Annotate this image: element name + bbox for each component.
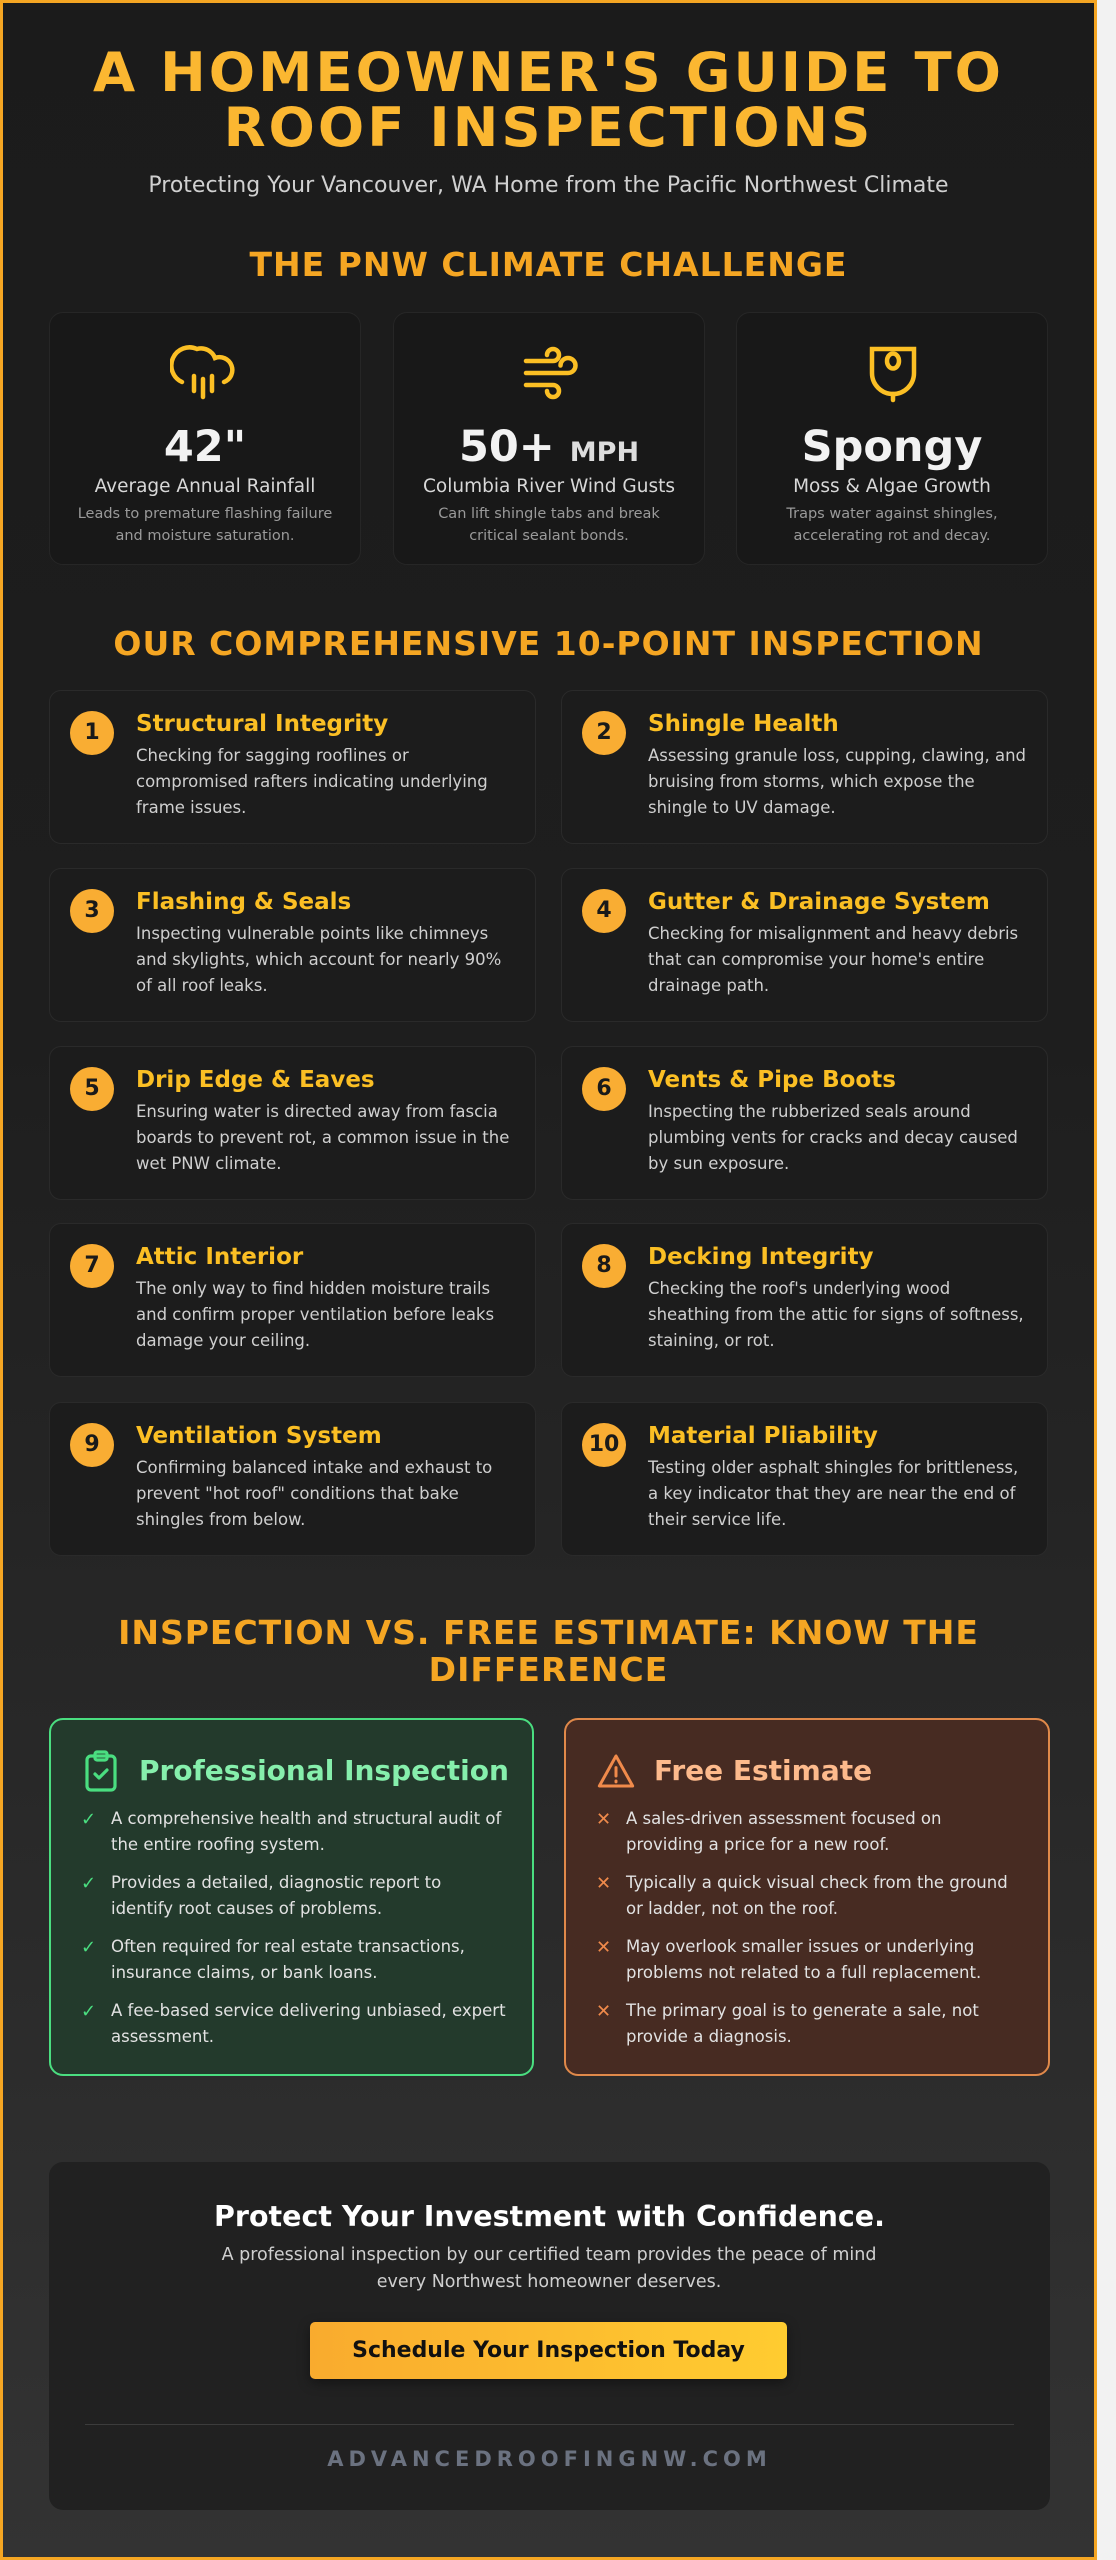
icon: rain cloud: [170, 345, 235, 400]
list: A comprehensive health and structural audit of the entire roofing system.: [111, 1809, 501, 1854]
card 6: Vents & Pipe Boots: [648, 1067, 896, 1093]
card 1: 1: [84, 720, 100, 745]
card 8: Checking the roof's underlying wood sheathing from the attic for signs of softness, staining, or rot.: [648, 1279, 1024, 1350]
card 10: Testing older asphalt shingles for brittleness, a key indicator that they are near the end of their service life.: [648, 1458, 1018, 1529]
title: [93, 40, 1004, 159]
card 10: 10: [589, 1432, 619, 1457]
heading: climate challenge: THE PNW CLIMATE CHALLENGE: [250, 245, 847, 284]
card 2: 2: [596, 720, 612, 745]
panel heading: Professional Inspection: [139, 1754, 509, 1787]
list: ✓: [81, 2001, 96, 2022]
card 4: Checking for misalignment and heavy debris that can compromise your home's entire drainage path.: [648, 924, 1018, 995]
icon: moss: [870, 346, 916, 402]
list: ✕: [596, 1809, 611, 1830]
card 5: Ensuring water is directed away from fascia boards to prevent rot, a common issue in the wet PNW climate.: [136, 1102, 509, 1173]
card 9: Ventilation System: [136, 1423, 382, 1449]
stat card: rainfall: [49, 312, 361, 565]
stat description: Traps water against shingles, accelerating rot and decay.: [786, 506, 998, 544]
list: Provides a detailed, diagnostic report to identify root causes of problems.: [111, 1873, 441, 1918]
card 3: Inspecting vulnerable points like chimneys and skylights, which account for nearly 90% of all roof leaks.: [136, 924, 501, 995]
card 5: [49, 1046, 536, 1200]
title: A HOMEOWNER'S GUIDE TO: [93, 40, 1004, 104]
list: Typically a quick visual check from the ground or ladder, not on the roof.: [626, 1873, 1008, 1918]
stat number: Spongy: [802, 422, 982, 472]
icon: warning: [598, 1754, 634, 1788]
card 4: [561, 868, 1048, 1022]
panel: free estimate: [564, 1718, 1050, 2076]
list: ✕: [596, 2001, 611, 2022]
card 7: The only way to find hidden moisture trails and confirm proper ventilation before leaks damage your ceiling.: [136, 1279, 494, 1350]
card 7: [49, 1223, 536, 1377]
card 6: 6: [596, 1076, 612, 1101]
icon: wind: [524, 346, 578, 400]
card 3: [49, 868, 536, 1022]
subtitle: Protecting Your Vancouver, WA Home from the Pacific Northwest Climate: [148, 173, 949, 198]
heading: comparison: DIFFERENCE: [429, 1650, 668, 1689]
stat description: Can lift shingle tabs and break critical sealant bonds.: [438, 506, 660, 544]
list: ✓: [81, 1873, 96, 1894]
card 3: 3: [84, 898, 100, 923]
card 2: Assessing granule loss, cupping, clawing, and bruising from storms, which expose the shingle to UV damage.: [648, 746, 1026, 817]
list: [81, 1809, 506, 2046]
card 7: 7: [84, 1253, 100, 1278]
list: A sales-driven assessment focused on providing a price for a new roof.: [626, 1809, 941, 1854]
card 4: Gutter & Drainage System: [648, 889, 990, 915]
card 5: 5: [84, 1076, 100, 1101]
stat label: Columbia River Wind Gusts: [423, 476, 675, 497]
heading: comparison: [118, 1613, 979, 1689]
card 9: 9: [84, 1432, 100, 1457]
card 3: Flashing & Seals: [136, 889, 351, 915]
card 9: Confirming balanced intake and exhaust to prevent "hot roof" conditions that bake shingles from below.: [136, 1458, 492, 1529]
card 5: Drip Edge & Eaves: [136, 1067, 375, 1093]
card 8: [561, 1223, 1048, 1377]
card 8: Decking Integrity: [648, 1244, 874, 1270]
card 6: Inspecting the rubberized seals around plumbing vents for cracks and decay caused by sun exposure.: [648, 1102, 1018, 1173]
list: ✕: [596, 1873, 611, 1894]
list: The primary goal is to generate a sale, not provide a diagnosis.: [626, 2001, 979, 2046]
stat label: Average Annual Rainfall: [95, 476, 315, 497]
list: ✓: [81, 1937, 96, 1958]
heading: comparison: INSPECTION VS. FREE ESTIMATE: KNOW THE: [118, 1613, 979, 1652]
stat number: 50+ MPH: [459, 422, 639, 472]
card 10: Material Pliability: [648, 1423, 878, 1449]
card 6: [561, 1046, 1048, 1200]
list: A fee-based service delivering unbiased, expert assessment.: [111, 2001, 506, 2046]
card 10: [561, 1402, 1048, 1556]
cta text: A professional inspection by our certified team provides the peace of mind every Northwest homeowner deserves.: [222, 2245, 876, 2292]
list: May overlook smaller issues or underlying problems not related to a full replacement.: [626, 1937, 981, 1982]
card 1: Structural Integrity: [136, 711, 388, 737]
stat number: 42": [164, 422, 246, 472]
card 1: [49, 690, 536, 844]
button: Schedule Your Inspection Today: [352, 2338, 745, 2363]
card 2: [561, 690, 1048, 844]
list: [596, 1809, 1008, 2046]
card 8: 8: [596, 1253, 612, 1278]
card 9: [49, 1402, 536, 1556]
card 4: 4: [596, 898, 612, 923]
list: ✓: [81, 1809, 96, 1830]
panel: call to action: [49, 2162, 1050, 2510]
card 7: Attic Interior: [136, 1244, 303, 1270]
card 2: Shingle Health: [648, 711, 839, 737]
heading: 10-point inspection: OUR COMPREHENSIVE 10-POINT INSPECTION: [113, 624, 984, 663]
list: Often required for real estate transactions, insurance claims, or bank loans.: [111, 1937, 465, 1982]
list: ✕: [596, 1937, 611, 1958]
website url: ADVANCEDROOFINGNW.COM: [327, 2447, 772, 2471]
cta heading: Protect Your Investment with Confidence.: [214, 2200, 885, 2233]
button: [310, 2322, 787, 2379]
icon: clipboard: [85, 1750, 117, 1792]
card 1: Checking for sagging rooflines or compromised rafters indicating underlying frame issues.: [136, 746, 488, 817]
stat description: Leads to premature flashing failure and moisture saturation.: [78, 506, 332, 544]
title: ROOF INSPECTIONS: [224, 95, 873, 159]
stat card: wind: [393, 312, 705, 565]
panel heading: Free Estimate: [654, 1754, 872, 1787]
stat label: Moss & Algae Growth: [793, 476, 991, 497]
panel: professional inspection: [49, 1718, 534, 2076]
stat card: moss: [736, 312, 1048, 565]
